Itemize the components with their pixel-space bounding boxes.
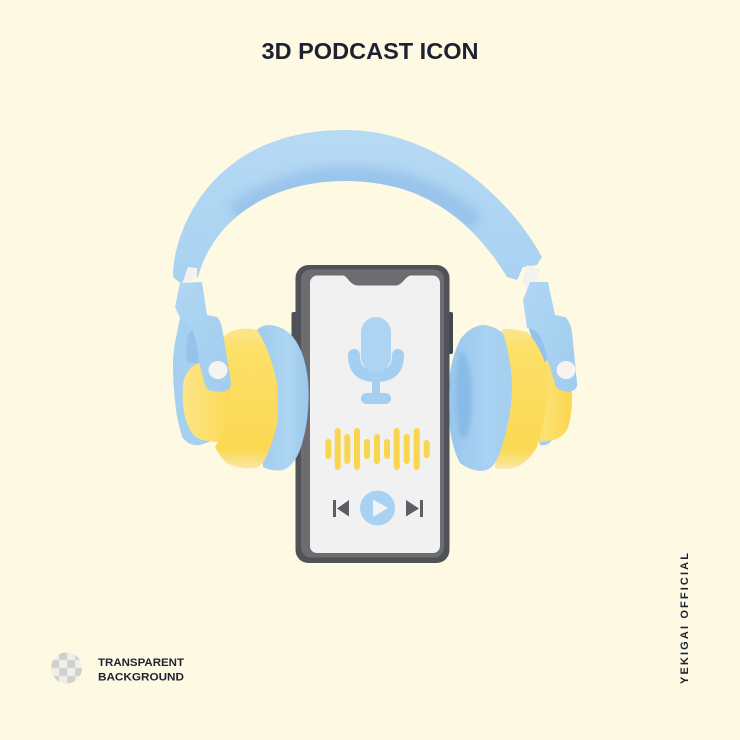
smartphone (292, 265, 453, 563)
right headband connector (522, 265, 540, 292)
mic capsule (361, 317, 391, 372)
checker icon (51, 652, 82, 684)
audio waveform (325, 428, 430, 470)
vertical brand text: YEKIGAI OFFICIAL (679, 553, 691, 684)
left ear cup (173, 282, 309, 470)
left large yellow cup (215, 329, 278, 468)
title: 3D PODCAST ICON (262, 38, 478, 64)
left headband connector (182, 267, 197, 284)
player controls (333, 490, 423, 526)
left small yellow cup (183, 362, 238, 442)
play button (360, 490, 395, 526)
badge label: BACKGROUND (98, 672, 184, 684)
left white rivet (208, 361, 228, 379)
next button (406, 500, 423, 517)
microphone icon (354, 317, 398, 404)
right side button (447, 312, 453, 354)
right ear pad inner recess (456, 352, 472, 439)
transparent background badge (50, 652, 187, 684)
left side button (292, 312, 298, 344)
headband base (173, 130, 542, 283)
right arm (523, 282, 577, 392)
right yoke inner hole (528, 326, 553, 365)
phone body (296, 265, 450, 563)
mic stem (372, 375, 380, 395)
mic stand cradle (354, 355, 398, 376)
left yoke inner hole (186, 330, 203, 364)
left arm (175, 282, 231, 392)
badge label: TRANSPARENT (98, 657, 184, 669)
right ear pad (449, 325, 512, 471)
infographic canvas (51, 43, 688, 684)
play triangle (373, 500, 388, 517)
left ear pad (257, 325, 309, 470)
right large yellow cup (495, 329, 547, 469)
left yoke back strap (173, 318, 215, 445)
right ear cup (449, 282, 577, 471)
right white rivet (556, 361, 576, 379)
previous button (333, 500, 349, 517)
headband (173, 130, 542, 283)
phone bezel (301, 270, 444, 558)
mic base (361, 393, 391, 404)
right yoke lower edge (538, 438, 553, 445)
headband inner shade (235, 178, 475, 225)
right small yellow cup (530, 360, 572, 442)
phone screen (310, 276, 440, 553)
